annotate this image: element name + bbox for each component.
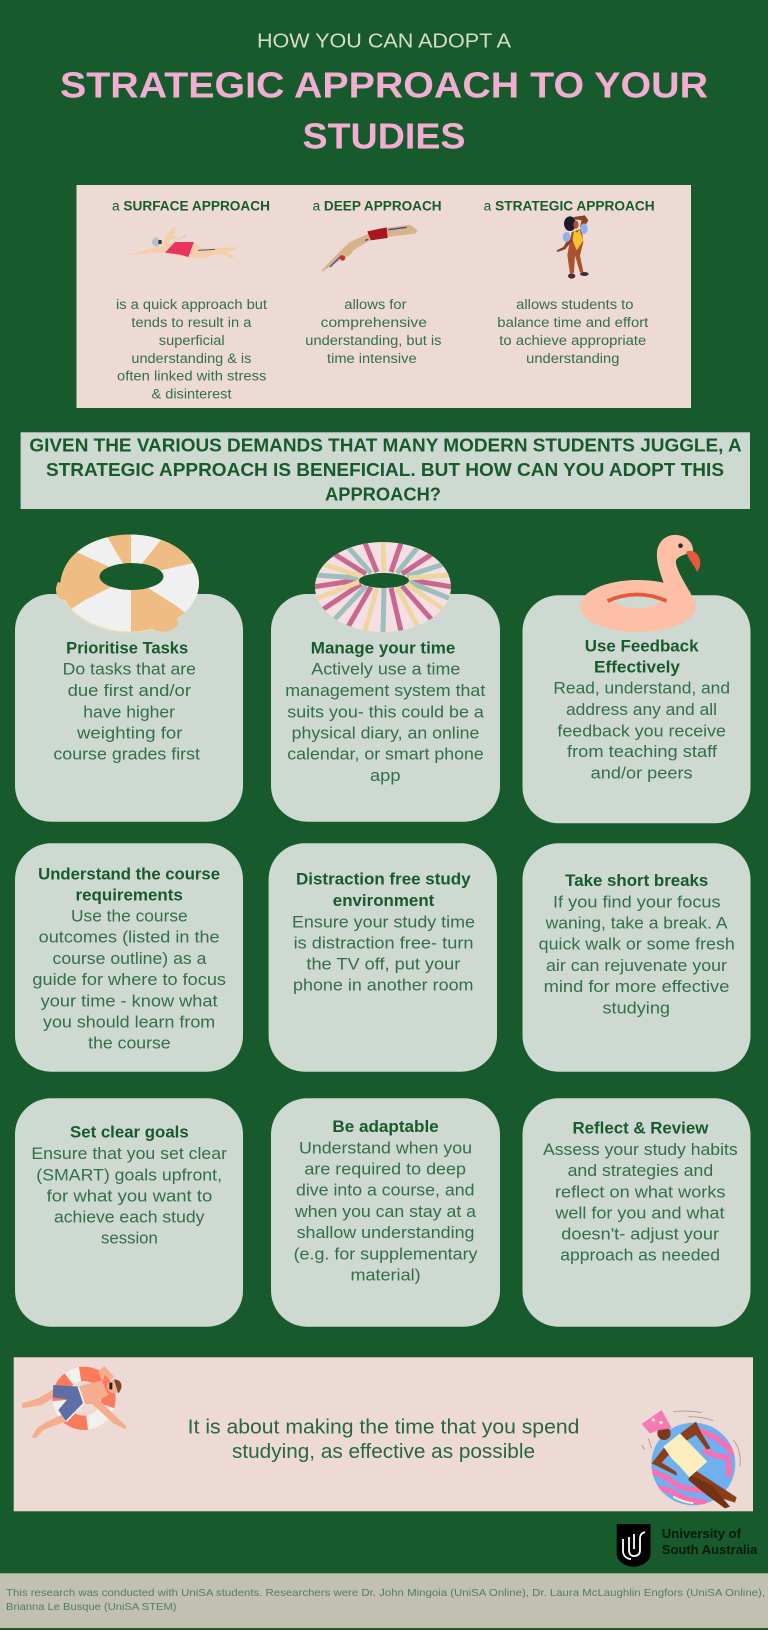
closing statement: studying, as effective as possible	[232, 1441, 535, 1463]
card: distraction free study environment	[269, 843, 497, 1072]
strategic approach description: understanding	[526, 351, 619, 366]
body text: If you find your focus	[553, 893, 721, 911]
body text: suits you- this could be a	[287, 703, 485, 721]
panel: closing message	[14, 1357, 753, 1511]
body text	[285, 661, 486, 785]
body text: you should learn from	[43, 1013, 215, 1031]
column: deep approach: a DEEP APPROACH	[313, 198, 442, 214]
card heading: Understand the course	[38, 866, 220, 884]
body text: feedback you receive	[557, 722, 726, 740]
surface approach description: & disinterest	[152, 387, 232, 402]
body text: your time - know what	[41, 992, 218, 1010]
icon: standing woman	[557, 215, 589, 279]
body text: are required to deep	[304, 1161, 466, 1179]
icon: life ring	[56, 534, 199, 632]
body text: air can rejuvenate your	[546, 957, 728, 975]
logo wordmark: University of	[662, 1526, 742, 1541]
icon: diver	[321, 225, 418, 271]
deep approach description: allows for	[344, 297, 407, 312]
body text: session	[101, 1230, 158, 1248]
question banner: GIVEN THE VARIOUS DEMANDS THAT MANY MODERN STUDENTS JUGGLE, A	[29, 435, 742, 456]
card heading: environment	[333, 892, 435, 910]
card heading: requirements	[76, 886, 183, 904]
surface approach description	[116, 297, 267, 402]
card: understand the course requirements	[15, 843, 243, 1072]
strategic approach description: balance time and effort	[497, 315, 649, 330]
closing statement: It is about making the time that you spend	[188, 1416, 579, 1438]
body text: course outline) as a	[52, 950, 207, 968]
strategic approach description: allows students to	[516, 297, 634, 312]
body text: achieve each study	[54, 1209, 205, 1227]
logo: University of South Australia	[617, 1524, 758, 1567]
card: manage your time	[271, 594, 500, 822]
title kicker: HOW YOU CAN ADOPT A	[257, 29, 511, 52]
deep approach description	[305, 297, 442, 366]
body text: (e.g. for supplementary	[294, 1245, 478, 1263]
body text: when you can stay at a	[294, 1203, 477, 1221]
footer: research credits: Brianna Le Busque (UniSA STEM)	[6, 1601, 176, 1613]
body text: app	[370, 767, 400, 785]
icon: swimmer	[127, 227, 237, 258]
card heading: Use Feedback	[585, 638, 699, 656]
body text: doesn't- adjust your	[561, 1226, 720, 1244]
closing statement	[188, 1416, 579, 1463]
card: use feedback effectively	[522, 595, 750, 823]
card heading	[296, 871, 471, 910]
body text: (SMART) goals upfront,	[36, 1166, 222, 1184]
body text: well for you and what	[554, 1204, 725, 1222]
column: strategic approach: a STRATEGIC APPROACH	[484, 198, 655, 214]
body text: calendar, or smart phone	[287, 746, 484, 764]
body text: have higher	[83, 703, 176, 721]
body text: Actively use a time	[311, 661, 460, 679]
surface approach description: often linked with stress	[117, 369, 267, 384]
column: strategic approach	[484, 198, 655, 366]
card: take short breaks: Take short breaks	[565, 872, 708, 890]
body text: is distraction free- turn	[294, 934, 474, 952]
surface approach description: is a quick approach but	[116, 297, 267, 312]
surface approach description: tends to result in a	[131, 315, 252, 330]
deep approach description: understanding, but is	[305, 333, 442, 348]
card: be adaptable	[271, 1098, 500, 1327]
body text	[539, 893, 735, 1017]
body text	[32, 908, 226, 1053]
body text: waning, take a break. A	[545, 915, 728, 933]
body text: the course	[88, 1035, 171, 1053]
body text: for what you want to	[47, 1187, 212, 1205]
body text: address any and all	[566, 701, 717, 719]
card: reflect and review: Reflect & Review	[572, 1120, 708, 1138]
body text: guide for where to focus	[32, 971, 226, 989]
body text	[292, 913, 475, 995]
body text: phone in another room	[293, 977, 474, 995]
strategic approach description: to achieve appropriate	[499, 333, 646, 348]
body text: reflect on what works	[555, 1183, 726, 1201]
body text: from teaching staff	[567, 743, 717, 761]
card heading	[585, 638, 699, 677]
icon: striped donut float	[313, 541, 453, 633]
main title: STUDIES	[302, 115, 466, 156]
body text	[553, 680, 730, 782]
column: surface approach	[112, 198, 270, 402]
icon: man on life ring	[22, 1363, 127, 1438]
body text: outcomes (listed in the	[39, 929, 220, 947]
surface approach description: understanding & is	[131, 351, 252, 366]
strategic approach description	[497, 297, 649, 366]
body text: the TV off, put your	[306, 955, 461, 973]
main title: STRATEGIC APPROACH TO YOUR	[60, 64, 708, 105]
card: prioritise tasks: Prioritise Tasks	[66, 640, 188, 658]
icon: flamingo float	[580, 535, 700, 632]
body text: physical diary, an online	[292, 724, 479, 742]
body text: Read, understand, and	[553, 680, 730, 698]
body text: studying	[602, 999, 670, 1017]
title	[60, 29, 708, 156]
question banner: STRATEGIC APPROACH IS BENEFICIAL. BUT HOW CAN YOU ADOPT THIS	[46, 459, 724, 480]
card: be adaptable: Be adaptable	[332, 1118, 439, 1136]
body text	[543, 1141, 738, 1265]
body text: Assess your study habits	[543, 1141, 738, 1159]
surface approach description: superficial	[159, 333, 225, 348]
body text: management system that	[285, 682, 486, 700]
footer: research credits	[0, 1573, 768, 1628]
card: set clear goals	[15, 1098, 243, 1327]
card heading: Distraction free study	[296, 871, 471, 889]
body text	[53, 661, 200, 764]
column: deep approach	[305, 198, 442, 366]
deep approach description: comprehensive	[321, 315, 427, 330]
body text: Do tasks that are	[63, 661, 196, 679]
logo wordmark: South Australia	[662, 1542, 758, 1557]
logo shield	[617, 1524, 650, 1567]
card: take short breaks	[522, 843, 750, 1072]
column: surface approach: a SURFACE APPROACH	[112, 198, 270, 214]
body text: Ensure that you set clear	[31, 1145, 228, 1163]
body text: Understand when you	[299, 1139, 472, 1157]
body text: shallow understanding	[297, 1224, 474, 1242]
body text: Use the course	[71, 908, 188, 926]
body text: material)	[350, 1266, 421, 1284]
card heading	[38, 866, 220, 904]
body text: weighting for	[76, 724, 183, 742]
body text: and/or peers	[591, 764, 693, 782]
body text: dive into a course, and	[296, 1182, 474, 1200]
body text: due first and/or	[68, 682, 192, 700]
body text: and strategies and	[568, 1162, 713, 1180]
card: prioritise tasks	[15, 594, 243, 822]
body text: course grades first	[53, 746, 200, 764]
panel: three approaches	[76, 185, 691, 408]
body text: mind for more effective	[544, 978, 729, 996]
footer: research credits: This research was conducted with UniSA students. Researchers were Dr. John Mingoia (UniSA Online), Dr. Laura McLaughlin Engfors (UniSA Online),	[6, 1587, 765, 1599]
card: manage your time: Manage your time	[311, 640, 455, 658]
main title	[60, 64, 708, 156]
card: reflect and review	[522, 1098, 750, 1327]
card: set clear goals: Set clear goals	[70, 1124, 189, 1142]
body text: quick walk or some fresh	[539, 936, 735, 954]
logo wordmark	[662, 1526, 758, 1557]
question banner	[21, 432, 750, 509]
body text: Ensure your study time	[292, 913, 475, 931]
question banner: APPROACH?	[325, 484, 441, 504]
icon: woman on pool float	[642, 1410, 740, 1508]
body text	[294, 1139, 478, 1284]
deep approach description: time intensive	[327, 351, 417, 366]
body text: approach as needed	[560, 1247, 720, 1265]
body text	[31, 1145, 228, 1248]
card heading: Effectively	[594, 659, 681, 677]
